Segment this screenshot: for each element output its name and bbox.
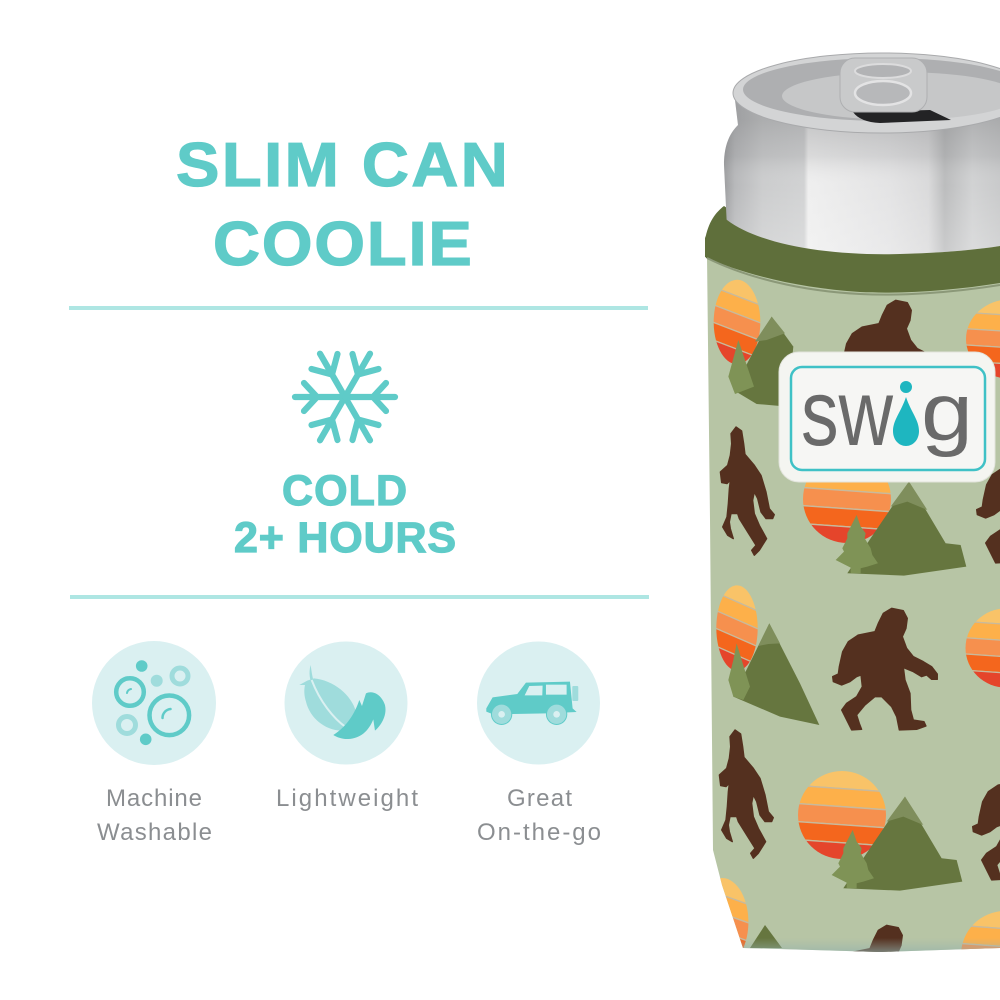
sun bottom left: [720, 878, 748, 948]
title: [176, 130, 508, 279]
lid highlight: [782, 72, 1000, 120]
label: machine washable: Machine: [106, 785, 202, 812]
logo wordmark: sw: [801, 360, 894, 465]
mountain under logo: [836, 482, 966, 576]
collar stitch: [707, 258, 1000, 295]
sun top right: [966, 300, 1000, 378]
divider bottom: [70, 595, 649, 599]
can lid: [743, 58, 1000, 121]
heading: cold 2+ hours: 2+ HOURS: [234, 514, 456, 562]
icon: machine washable bubbles: [92, 641, 216, 765]
collar back: [705, 206, 760, 262]
sun bottom right: [961, 911, 1000, 950]
sleeve pattern: [714, 280, 1000, 952]
bottom shadow: [740, 940, 1000, 952]
sun mid left: [716, 585, 758, 669]
label: lightweight: Lightweight: [276, 785, 418, 812]
sasquatch bottom: [853, 924, 903, 952]
label: great on-the-go: On-the-go: [477, 819, 601, 846]
panel: product photo of can in coolie: [705, 52, 1000, 952]
heading: cold 2+ hours: COLD: [282, 467, 407, 515]
label: great on-the-go: [477, 785, 601, 846]
sasquatch row 1: [720, 300, 1000, 563]
icon: feather: [284, 642, 408, 764]
can shading: [724, 100, 1000, 254]
can body: [724, 100, 1000, 254]
sun top left: [714, 280, 760, 364]
sun bottom center: [798, 771, 886, 859]
logo wordmark: [801, 360, 973, 465]
sasquatch walking center: [833, 608, 937, 730]
logo wordmark: g: [921, 367, 973, 458]
collar front: [705, 218, 1000, 293]
can opening: [853, 110, 951, 123]
divider top: [69, 306, 648, 310]
icon: jeep: [477, 642, 600, 764]
sasquatch standing left: [719, 730, 773, 858]
title: COOLIE: [213, 209, 472, 279]
logo patch: [779, 352, 995, 482]
mountain mid left: [728, 623, 819, 725]
mountain top left: [728, 317, 793, 407]
sun mid right: [966, 608, 1000, 688]
can rim: [733, 53, 1000, 133]
heading: cold 2+ hours: [234, 467, 456, 562]
label: great on-the-go: Great: [507, 785, 572, 812]
title: SLIM CAN: [176, 130, 508, 200]
panel: product text and icons: [69, 130, 649, 846]
sleeve body: [707, 255, 1000, 952]
mountain bottom center: [832, 797, 962, 891]
sun under logo: [803, 482, 891, 543]
label: machine washable: [97, 785, 212, 846]
label: machine washable: Washable: [97, 819, 212, 846]
sasquatch right: [972, 784, 1000, 881]
mountain bottom left: [750, 925, 782, 948]
can pull tab: [840, 58, 927, 112]
icon: snowflake: [295, 346, 395, 448]
